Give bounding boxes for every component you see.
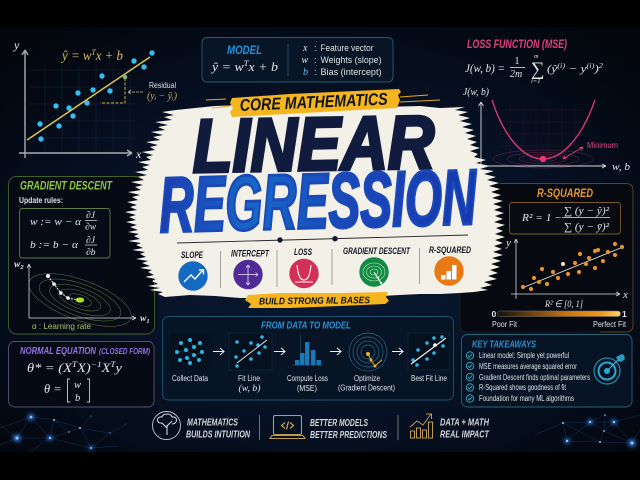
residual label: (yᵢ − ŷᵢ) (147, 91, 178, 102)
concept: loss (289, 247, 319, 288)
r-squared heading: R-SQUARED (537, 188, 593, 200)
loss chart (463, 87, 631, 173)
step: fit line (229, 333, 272, 393)
theta vector (44, 379, 90, 404)
loss equation (465, 54, 604, 85)
axis labels: y (13, 38, 20, 52)
takeaways heading: KEY TAKEAWAYS (472, 338, 536, 350)
takeaway items: R-Squared shows goodness of fit (479, 383, 567, 392)
goodness of fit scale: 1 (622, 309, 627, 319)
concept: intercept (231, 248, 270, 289)
footer message: data plus math (410, 414, 490, 440)
loss equation: 1 (514, 56, 520, 67)
loss equation: 2m (510, 69, 522, 80)
step: optimize: (Gradient Descent) (338, 384, 395, 392)
model variables: Weights (slope) (320, 55, 382, 65)
step: optimize (338, 333, 395, 392)
loss equation: (i) (557, 62, 566, 70)
concept: gradient descent (343, 246, 411, 287)
axis labels: x (135, 147, 142, 161)
theta vector: w (74, 380, 81, 391)
equation: ŷ = w (62, 48, 93, 63)
loss chart: w, b (612, 161, 631, 173)
normal equation formula: X) (76, 361, 91, 375)
footer message: data plus math: DATA + MATH (440, 418, 490, 428)
goodness of fit scale: Perfect Fit (593, 320, 627, 329)
normal equation formula: θ* = (X (27, 361, 66, 375)
step: fit line: (w, b) (238, 383, 260, 393)
contour plot: w (140, 314, 146, 324)
network decoration: bottom right (535, 414, 640, 446)
normal equation formula: T (110, 360, 116, 369)
axes (19, 50, 132, 158)
normal equation formula: X (100, 361, 112, 375)
model variables: : (314, 43, 317, 53)
model heading: MODEL (227, 43, 262, 57)
title: linear: LINEAR (192, 100, 435, 188)
r-squared scatter chart (505, 237, 628, 301)
loss equation: i=1 (531, 78, 540, 85)
contour plot: 2 (19, 264, 24, 271)
learning rate note: α : Learning rate (32, 321, 91, 331)
panel: model definition (202, 38, 393, 82)
flow heading: FROM DATA TO MODEL (261, 320, 351, 332)
network decoration: bottom left (0, 414, 127, 452)
normal equation formula: T (72, 360, 78, 369)
normal equation heading: (CLOSED FORM) (99, 347, 150, 356)
panel: scatter plot with regression line (13, 38, 178, 161)
model variables: b (303, 67, 308, 78)
step: optimize: Optimize (354, 374, 380, 383)
arrow (274, 348, 285, 355)
concept: loss: LOSS (294, 247, 312, 258)
model variables: Feature vector (320, 43, 374, 53)
loss equation: (ŷ (547, 63, 556, 75)
update rules label: Update rules: (19, 195, 63, 205)
goodness of fit scale (492, 309, 627, 329)
icon: laptop code (270, 416, 305, 438)
panel: loss function (463, 37, 631, 173)
goodness of fit scale: 0 (492, 309, 496, 319)
footer message: mathematics builds intuition (152, 412, 251, 440)
step: compute loss (287, 335, 328, 393)
normal equation heading: NORMAL EQUATION (20, 345, 96, 357)
r-squared range: R² ∈ [0, 1] (544, 300, 583, 310)
normal equation formula: y (113, 361, 123, 375)
footer message: better models: BETTER PREDICTIONS (310, 430, 387, 441)
arrow (330, 348, 341, 355)
loss equation: ∑ (531, 59, 545, 80)
concept: slope (178, 250, 208, 291)
banner: core mathematics (206, 89, 440, 117)
takeaway items (479, 351, 590, 403)
model variables: Bias (intercept) (320, 67, 382, 77)
loss equation: − y (565, 63, 587, 75)
arrow (392, 348, 403, 355)
r-squared scatter chart: y (505, 237, 511, 249)
update rules formulas: ∂b (86, 248, 96, 258)
model equation: T (244, 59, 249, 68)
footer message: data plus math: REAL IMPACT (440, 430, 490, 440)
step: collect data: Collect Data (172, 374, 208, 383)
step: fit line: Fit Line (238, 374, 260, 383)
residual label (147, 80, 178, 102)
contour plot (14, 260, 150, 337)
loss chart: J(w, b) (463, 87, 489, 98)
panel: from data to model (162, 316, 454, 400)
update rules formulas: ∂J (86, 236, 96, 246)
concept: r-squared: R-SQUARED (429, 245, 471, 256)
contour plot: w (14, 260, 20, 270)
model equation: x + b (247, 59, 279, 74)
r-squared formula (510, 202, 620, 234)
r-squared formula: ∑ (y − ŷ)² (564, 206, 610, 217)
step: collect data (170, 333, 210, 383)
loss equation: (i) (586, 62, 595, 70)
step: compute loss: Compute Loss (287, 374, 328, 383)
concept: intercept: INTERCEPT (231, 248, 270, 260)
concept: gradient descent: GRADIENT DESCENT (343, 246, 411, 257)
banner: build strong ml bases: BUILD STRONG ML BASES (259, 295, 371, 307)
update rules formulas (20, 208, 110, 258)
model variables (302, 43, 382, 78)
normal equation formula: −1 (91, 360, 102, 369)
goodness of fit scale: Poor Fit (492, 320, 518, 329)
contour plot: 1 (146, 318, 150, 325)
step: best fit line: Best Fit Line (411, 374, 447, 383)
arrow (213, 348, 224, 355)
concept: r-squared (429, 245, 471, 286)
takeaway items: Gradient Descent finds optimal parameters (479, 373, 590, 382)
loss heading: LOSS FUNCTION (MSE) (467, 37, 567, 51)
residual marker (100, 75, 143, 103)
banner: build strong ml bases (245, 292, 389, 308)
panel: gradient descent (8, 176, 154, 337)
icon: brain tree (158, 414, 176, 435)
gradient descent heading: GRADIENT DESCENT (20, 178, 113, 192)
takeaway items: Foundation for many ML algorithms (479, 394, 574, 403)
banner: core mathematics: CORE MATHEMATICS (239, 90, 389, 115)
model equation: ŷ = w (212, 59, 242, 74)
regression line (27, 57, 150, 140)
footer message: better models (270, 416, 387, 441)
loss chart: Minimum (587, 140, 618, 150)
white brush title panel (125, 105, 505, 298)
panel: r-squared (460, 184, 633, 332)
model variables: : (314, 67, 317, 77)
update rules formulas: ∂J (86, 211, 96, 221)
loss equation: J(w, b) = (465, 61, 505, 75)
axis labels (13, 38, 142, 161)
takeaway items: Linear model: Simple yet powerful (479, 351, 569, 360)
equation: x + b (95, 48, 123, 63)
model variables: w (302, 55, 308, 66)
update rules formulas: w := w − α (30, 216, 81, 228)
icon: target (594, 354, 625, 384)
concept row: core concepts (177, 235, 471, 291)
residual label: Residual (149, 80, 176, 90)
r-squared formula: ∑ (y − ȳ)² (564, 222, 610, 233)
concept: slope: SLOPE (181, 250, 203, 261)
model variables: : (314, 55, 317, 65)
step: compute loss: (MSE) (297, 384, 317, 393)
footer message: mathematics builds intuition: BUILDS INTUITION (186, 430, 251, 440)
data points (37, 50, 155, 142)
theta vector: θ = (44, 382, 62, 396)
panel: key takeaways (462, 334, 632, 407)
theta vector: b (75, 393, 80, 404)
footer message: mathematics builds intuition: MATHEMATICS (187, 418, 238, 428)
step: best fit line (408, 333, 449, 383)
loss equation: ) (593, 63, 599, 75)
equation: T (91, 48, 96, 57)
loss equation: 2 (599, 62, 604, 70)
icon: growth chart (410, 414, 432, 438)
r-squared scatter chart: x (622, 289, 628, 301)
loss equation: m (534, 54, 539, 60)
panel: normal equation (8, 342, 154, 407)
model variables: x (302, 43, 308, 54)
update rules formulas: ∂w (85, 222, 97, 232)
footer message: better models: BETTER MODELS (310, 418, 368, 429)
r-squared formula: R² = 1 − (521, 213, 562, 224)
check icons (466, 352, 474, 402)
update rules formulas: b := b − α (30, 239, 78, 251)
takeaway items: MSE measures average squared error (479, 362, 577, 371)
